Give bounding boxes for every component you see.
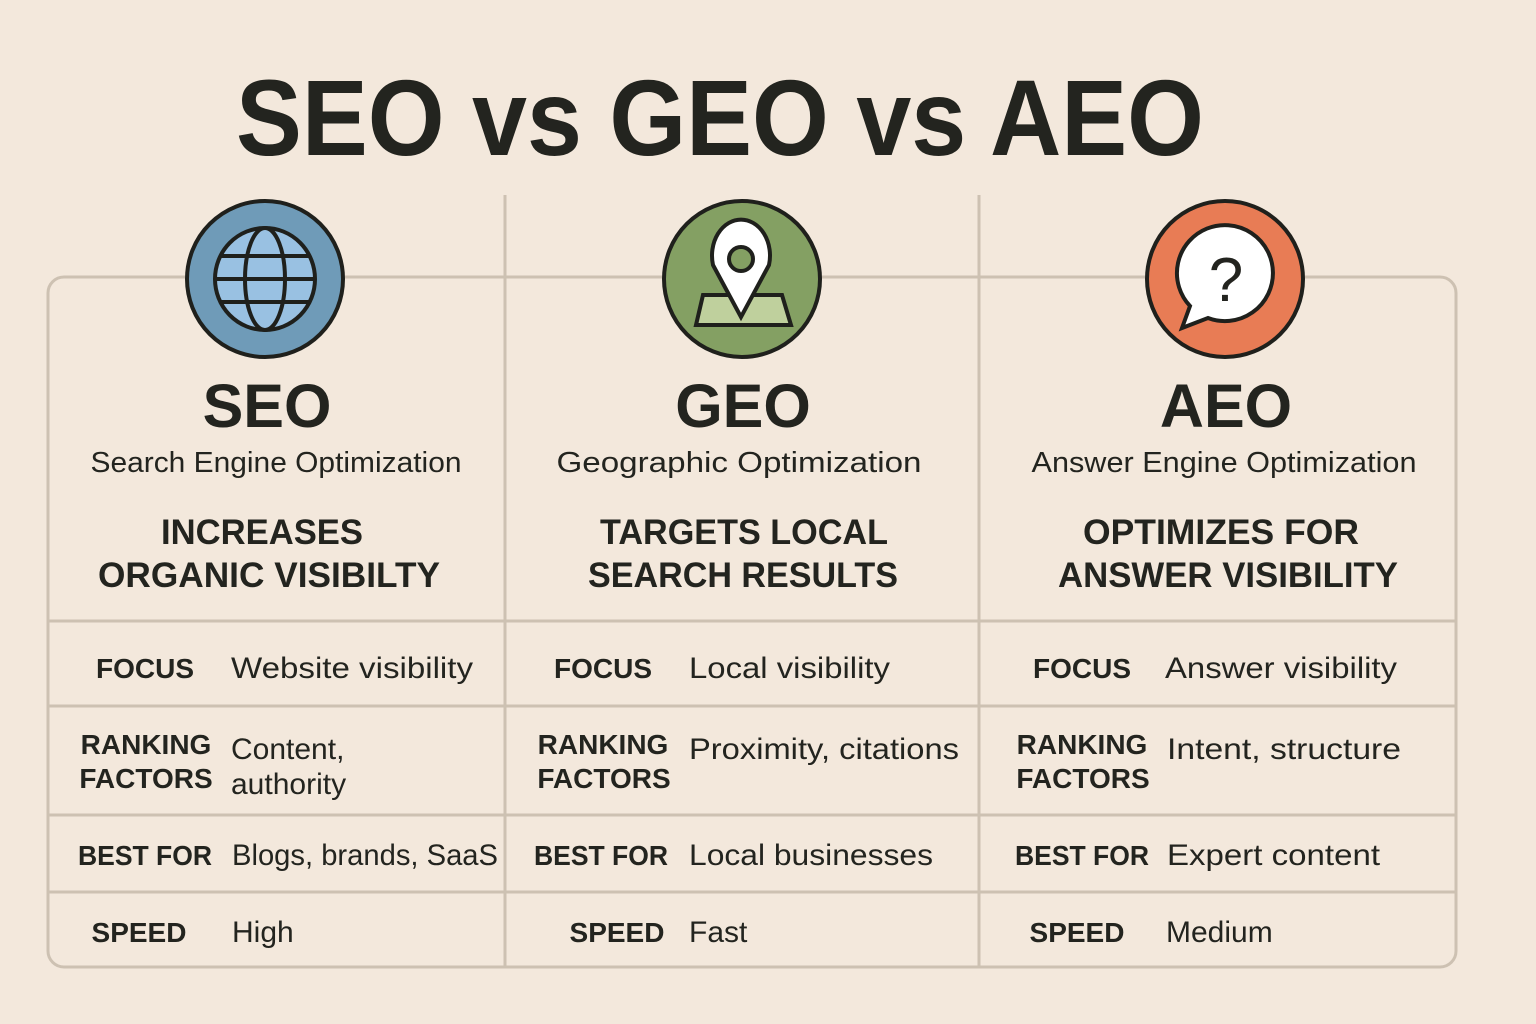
icon: map pin [664,201,820,357]
panel: SEO: SEO [203,372,331,440]
panel: AEO: OPTIMIZES FOR [1083,513,1359,552]
panel: GEO: SPEED [570,917,664,948]
panel: AEO: RANKING [1017,729,1147,760]
panel: AEO: Intent, structure [1167,733,1401,766]
panel: GEO: BEST FOR [534,840,668,871]
panel: AEO: Answer visibility [1165,652,1397,685]
panel: SEO: High [232,916,294,949]
panel: AEO: FOCUS [1033,653,1131,684]
panel: AEO: BEST FOR [1015,840,1149,871]
panel: SEO: Search Engine Optimization [90,447,461,479]
panel: SEO: Website visibility [231,652,473,685]
panel: SEO: Content, [231,733,344,766]
panel: AEO: ANSWER VISIBILITY [1058,556,1398,595]
panel: AEO: AEO [1160,372,1292,440]
panel: SEO: RANKING [81,729,211,760]
panel: AEO: Expert content [1167,839,1381,872]
panel: AEO: FACTORS [1016,763,1150,794]
panel: GEO: RANKING [538,729,668,760]
panel: AEO: Answer Engine Optimization [1032,447,1416,479]
panel: SEO: Blogs, brands, SaaS [232,839,498,872]
panel: AEO: SPEED [1030,917,1124,948]
icon: globe [187,201,343,357]
panel: GEO: GEO [675,372,811,440]
comparison table frame [48,195,1456,967]
panel: GEO: Local businesses [689,839,933,872]
panel: SEO: authority [231,768,346,801]
panel: GEO: Geographic Optimization [556,447,922,479]
panel: GEO: TARGETS LOCAL [600,513,888,552]
panel: GEO: SEARCH RESULTS [588,556,898,595]
panel: SEO: SPEED [92,917,186,948]
icon: question bubble [1147,201,1303,357]
title: SEO vs GEO vs AEO [236,57,1204,178]
panel: GEO: Local visibility [689,652,890,685]
panel: SEO: FOCUS [96,653,194,684]
panel: SEO: ORGANIC VISIBILTY [98,556,440,595]
panel: SEO: BEST FOR [78,840,212,871]
panel: GEO: Proximity, citations [689,733,959,766]
panel: GEO: Fast [689,916,748,949]
panel: SEO [78,372,498,949]
panel: GEO: FACTORS [537,763,671,794]
panel: GEO: FOCUS [554,653,652,684]
icon: question bubble: ? [1209,246,1243,315]
panel: GEO [534,372,959,949]
panel: AEO [1015,372,1416,949]
panel: AEO: Medium [1166,916,1273,949]
panel: SEO: FACTORS [79,763,213,794]
panel: SEO: INCREASES [161,513,363,552]
